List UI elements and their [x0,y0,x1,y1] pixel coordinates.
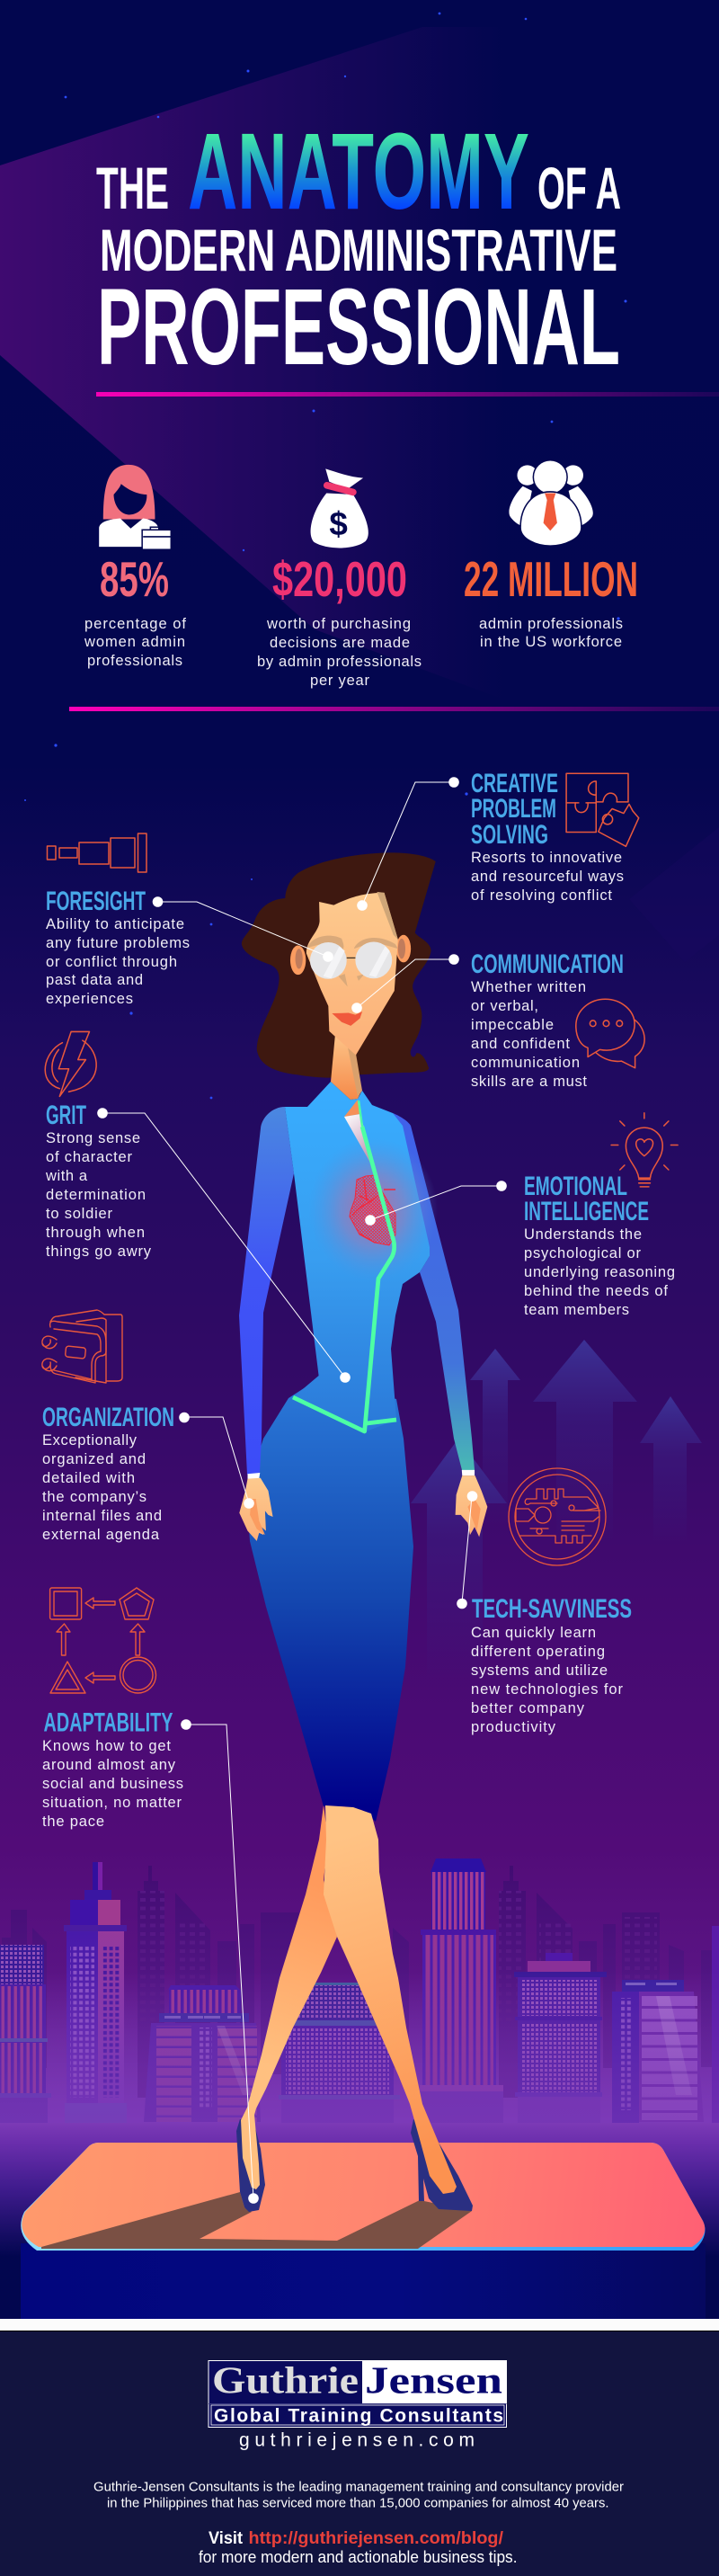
panel: adaptability [42,1588,183,1830]
panel: organization [42,1310,174,1543]
panel: tech-savviness: TECH-SAVVINESS [472,1594,632,1624]
icon: money bag: $ [329,505,348,542]
icon: chat bubbles [576,999,644,1068]
panel: adaptability: social and business [42,1776,183,1792]
panel: foresight: FORESIGHT [46,887,146,916]
panel: creative problem solving: SOLVING [471,820,548,850]
stat: 85% women: percentage of [84,616,186,632]
panel: adaptability: situation, no matter [42,1795,182,1811]
panel: tech-savviness: different operating [471,1644,605,1660]
background arrows [411,1340,702,1681]
panel: creative problem solving: CREATIVE [471,769,558,798]
panel: creative problem solving: PROBLEM [471,794,556,824]
right shoe [411,2119,473,2211]
right arm [393,1113,475,1470]
icon: money bag [311,468,368,548]
company description: in the Philippines that has serviced more than 15,000 companies for almost 40 years. [107,2496,609,2510]
panel: creative problem solving [471,769,639,904]
panel: tech-savviness [471,1468,632,1735]
logo: GuthrieJensen: Global Training Consultants [214,2406,503,2426]
panel: creative problem solving: Resorts to innovative [471,850,622,866]
panel: adaptability: ADAPTABILITY [43,1708,173,1737]
panel: grit: things go awry [46,1243,152,1260]
icon: shapes cycle [50,1588,156,1693]
panel: emotional intelligence: behind the needs of [524,1283,668,1299]
panel: communication [471,949,644,1090]
striped tower [420,1858,503,2123]
panel: adaptability: Knows how to get [42,1738,171,1754]
panel: grit: Strong sense [46,1130,140,1146]
leader: grit [97,1108,351,1383]
left arm [239,1107,294,1475]
panel: emotional intelligence: underlying reasoning [524,1264,675,1280]
central building behind legs [279,1983,400,2123]
haze [0,1969,719,2123]
back leg [241,1805,337,2189]
icon: circuit key [509,1468,606,1565]
panel: creative problem solving: of resolving conflict [471,887,612,904]
title divider [96,392,719,397]
face [290,892,411,1055]
white separator band [0,2319,719,2331]
leader: creative problem solving [357,777,459,911]
building far left [0,1945,51,2123]
title [96,110,621,388]
stat: $20,000 purchasing: decisions are made [270,635,410,651]
stage platform [21,2143,706,2319]
jacket [285,1082,430,1432]
icon: puzzle [566,773,639,846]
panel: organization: external agenda [42,1527,160,1543]
panel: communication: COMMUNICATION [471,949,624,979]
dotted building [514,1953,607,2123]
panel: communication: Whether written [471,979,586,995]
panel: tech-savviness: better company [471,1700,585,1716]
logo: GuthrieJensen [209,2361,507,2428]
call to action [199,2528,518,2566]
panel: organization: the company’s [42,1489,146,1505]
neck [331,1034,362,1100]
front leg [324,1805,457,2194]
panel: communication: impeccable [471,1017,554,1033]
panel: communication: communication [471,1055,580,1071]
glass building [612,1926,719,2123]
panel: grit: through when [46,1225,145,1241]
panel: grit [45,1031,152,1260]
panel: creative problem solving: and resourceful ways [471,869,624,885]
panel: foresight: experiences [46,991,133,1007]
panel: organization: ORGANIZATION [42,1403,174,1432]
stat: 85% women: 85% [100,551,169,607]
stat: $20,000 purchasing: by admin professionals [257,654,422,670]
stat: 85% women [84,465,186,669]
panel: grit: determination [46,1187,146,1203]
stat: 85% women: women admin [84,634,185,650]
call to action: for more modern and actionable business tips. [199,2548,518,2566]
stat: $20,000 purchasing: $20,000 [272,551,407,607]
stage floor [0,2123,719,2319]
stat: 22 million: admin professionals [479,616,623,632]
right hand [456,1470,487,1537]
panel: grit: of character [46,1149,133,1165]
panel: grit: to soldier [46,1206,113,1222]
stat: $20,000 purchasing [257,468,422,689]
panel: tech-savviness: new technologies for [471,1681,624,1698]
panel: emotional intelligence: EMOTIONAL [524,1172,627,1201]
panel: tech-savviness: systems and utilize [471,1662,608,1679]
panel: adaptability: around almost any [42,1757,176,1773]
heart [308,1137,438,1281]
logo: GuthrieJensen: Guthrie [212,2361,359,2402]
leader: tech-savviness [457,1491,477,1609]
stat: $20,000 purchasing: per year [310,673,370,689]
panel: grit: GRIT [46,1101,86,1130]
panel: organization: Exceptionally [42,1432,138,1448]
leader: communication [351,954,459,1013]
panel: foresight: Ability to anticipate [46,916,184,932]
leader: organization [179,1413,254,1509]
panel: foresight: any future problems [46,935,190,951]
leader: emotional intelligence [365,1181,507,1226]
panel: emotional intelligence: Understands the [524,1226,642,1243]
panel: organization: organized and [42,1451,146,1467]
panel: foresight [46,833,190,1007]
panel: grit: with a [45,1168,88,1184]
left hand [239,1473,273,1541]
panel: communication: or verbal, [471,998,538,1014]
mid building [144,1985,261,2122]
panel: emotional intelligence: team members [524,1302,629,1318]
title: ANATOMY [188,110,529,232]
icon: spyglass [47,833,146,872]
collar [344,1100,375,1171]
website: guthriejensen.com [239,2429,475,2451]
title: OF A [537,155,621,221]
logo: GuthrieJensen: Jensen [365,2361,502,2402]
panel: foresight: past data and [46,972,143,988]
leader: adaptability [181,1719,259,2204]
icon: organizer [42,1310,122,1383]
stat: 22 million [464,460,638,650]
stats divider [69,707,719,711]
company description [93,2480,624,2510]
city skyline [0,1858,719,2123]
figure: professional woman [236,852,487,2212]
panel: communication: and confident [471,1036,570,1052]
icon: lightning [45,1031,96,1096]
panel: organization: detailed with [42,1470,135,1486]
footer [0,2331,719,2576]
panel: emotional intelligence [524,1113,678,1318]
panel: communication: skills are a must [471,1074,587,1090]
panel: emotional intelligence: INTELLIGENCE [524,1197,649,1226]
skirt [246,1380,413,1822]
leader: foresight [153,896,333,962]
icon: woman with briefcase [99,465,171,549]
company description: Guthrie-Jensen Consultants is the leading management training and consultancy provider [93,2480,624,2494]
distant towers [2,1866,713,2098]
title: THE [96,155,169,221]
panel: adaptability: the pace [42,1814,104,1830]
stat: $20,000 purchasing: worth of purchasing [266,616,411,632]
panel: emotional intelligence: psychological or [524,1245,642,1261]
icon: light bulb with heart [611,1113,678,1187]
stat: 85% women: professionals [87,653,182,669]
zipper [293,1101,396,1431]
tower left [64,1862,127,2123]
panel: tech-savviness: Can quickly learn [471,1625,596,1641]
panel: tech-savviness: productivity [471,1719,556,1735]
hair [242,852,436,1078]
call to action: http://guthriejensen.com/blog/ [248,2528,504,2548]
icon: people with tie [509,460,593,546]
panel: organization: internal files and [42,1508,162,1524]
stat: 22 million: in the US workforce [480,634,622,650]
panel: foresight: or conflict through [46,954,177,970]
left shoe [236,2119,265,2212]
call to action: Visit [209,2528,243,2548]
